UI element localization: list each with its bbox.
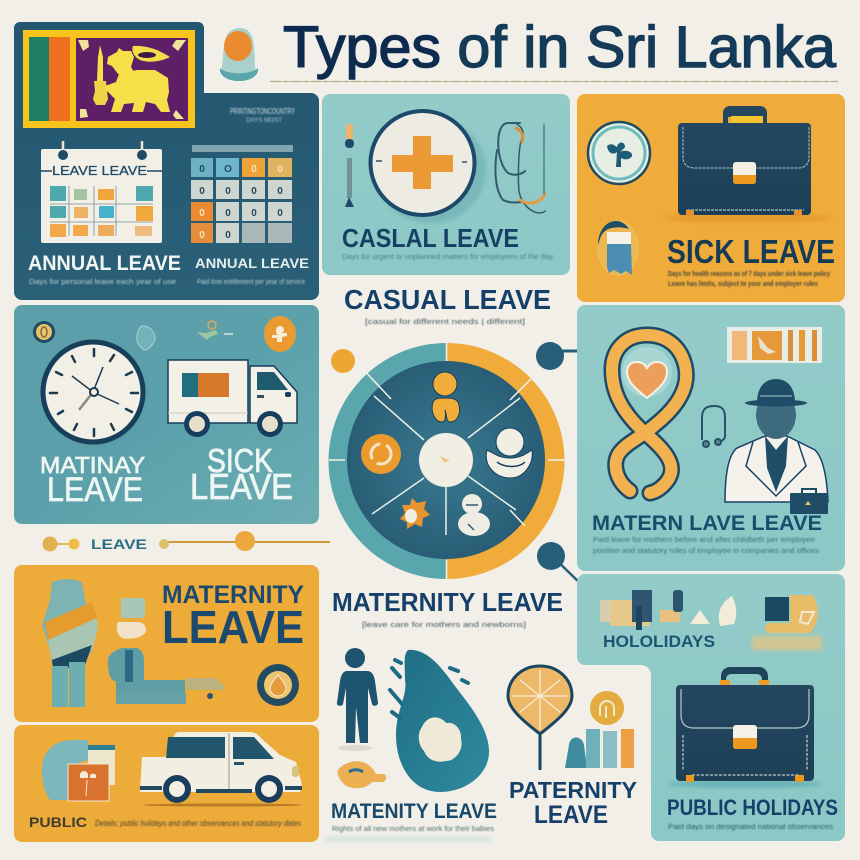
- icon: car: [140, 732, 302, 806]
- caption: maternity leave teal: position and statutory rules of employee in companies and offices: [593, 546, 819, 555]
- icon: person: [337, 648, 378, 751]
- chart: leave wheel: [328, 341, 565, 581]
- caption: annual leave: Days for personal leave each year of use: [29, 279, 176, 286]
- panel: maternity leave orange: [14, 565, 319, 722]
- icon: calendar grid: 0: [251, 208, 257, 219]
- heading: sick leave white: LEAVE: [190, 466, 293, 507]
- heading: maternity orange: MATERNITY: [162, 581, 304, 609]
- icon: delivery truck: [168, 360, 297, 437]
- icon: calendar grid: 0: [225, 208, 231, 219]
- icon: wheel segment right: [486, 428, 532, 478]
- panel: holidays and public holidays: [577, 574, 845, 841]
- icon: dropper: [345, 124, 354, 207]
- heading: matinay leave: [40, 452, 145, 509]
- icon: small coin: [33, 321, 55, 343]
- icon: briefcase: [662, 106, 832, 222]
- fuzzy caption above grid: PRINTINGTONCOUNTRY: [230, 107, 295, 116]
- panel: casual leave: [322, 94, 570, 275]
- heading: paternity leave: [509, 777, 637, 829]
- icon: magnifier: [508, 666, 572, 770]
- panel: public orange: [14, 725, 319, 842]
- icon: wheel segment lower right: [458, 494, 490, 536]
- icon: wheel segment lower left: [400, 498, 430, 529]
- heading: annual leave small: ANNUAL LEAVE: [195, 255, 309, 271]
- heading: annual leave: ANNUAL LEAVE: [28, 252, 181, 275]
- caption: annual leave: Paid time entitlement per year of service: [197, 279, 305, 286]
- heading: maternity orange: [162, 581, 304, 653]
- heading: paternity leave: LEAVE: [534, 801, 608, 829]
- icon: small plane: [197, 321, 233, 340]
- icon: clock: [43, 342, 144, 444]
- caption: matenity leave: Rights of all new mothers at work for their babies: [332, 826, 495, 833]
- title icon: [220, 28, 258, 81]
- caption: public: Details: public holidays and other observances and statutory dates: [95, 819, 301, 828]
- fuzzy caption above grid: DAYS MOST: [246, 118, 282, 124]
- icon: calendar grid: 0: [251, 164, 257, 175]
- connector dot: orange: [331, 349, 355, 373]
- caption: sick leave: Leave has limits, subject to your and employer rules: [668, 281, 818, 288]
- icon: stethoscope: [495, 123, 545, 213]
- caption: maternity leave teal: Paid leave for mothers before and after childbirth per employee: [593, 535, 815, 544]
- fuzzy caption above grid: [230, 107, 295, 124]
- icon: orange badge: [264, 316, 296, 352]
- caption: casual leave centre: [casual for different needs | different]: [365, 317, 525, 326]
- icon: calendar grid: 0: [277, 208, 283, 219]
- icon: ribbon: [612, 335, 686, 493]
- calendar label: LEAVE LEAVE: [52, 163, 147, 178]
- icon: heart: [622, 347, 672, 398]
- timeline: [42, 531, 330, 552]
- icon: calendar grid: 0: [277, 164, 283, 175]
- heading: matinay leave: MATINAY: [40, 452, 145, 478]
- icon: framed pictures: [727, 327, 822, 363]
- heading: maternity orange: LEAVE: [162, 601, 304, 653]
- icon: small stethoscope: [702, 406, 725, 447]
- icon: small orange token: [337, 761, 386, 788]
- icon: calendar grid: 0: [251, 186, 257, 197]
- caption: public holidays: Paid days on designated national observances: [668, 822, 833, 831]
- icon: doctor bag: [790, 489, 828, 514]
- panel: annual leave: [14, 22, 319, 300]
- icon: doctor: [725, 379, 828, 502]
- heading: holidays: HOLOLIDAYS: [603, 632, 715, 651]
- illustration: holiday objects: [600, 590, 822, 650]
- group: paternity illustrations: [508, 666, 637, 829]
- icon: briefcase 2: [667, 667, 823, 788]
- icon: wall calendar: [40, 141, 162, 243]
- icon: calendar grid: 0: [199, 164, 205, 175]
- heading: maternity leave teal: MATERN LAVE LEAVE: [592, 512, 822, 535]
- heading: matinay leave: LEAVE: [47, 471, 143, 509]
- icon: abstract figure: [42, 579, 98, 707]
- icon: bars: [565, 729, 634, 768]
- icon: coin: [590, 691, 624, 725]
- heading: sick leave white: SICK: [207, 442, 273, 479]
- panel: maternity and sick illustration: [14, 305, 319, 524]
- icon: Sri Lanka island: [390, 650, 489, 792]
- connector dot: navy bottom: [537, 542, 582, 585]
- icon: wheel segment top: [432, 372, 460, 422]
- caption: maternity leave teal: [593, 535, 819, 555]
- icon: document bundle: [42, 740, 115, 801]
- group: maternity illustrations: [326, 648, 497, 842]
- heading: paternity leave: PATERNITY: [509, 777, 637, 803]
- icon: calendar grid: [191, 145, 293, 243]
- icon: document shield: [598, 221, 638, 275]
- icon: faint gem: [137, 326, 155, 350]
- icon: calendar grid: 0: [199, 208, 205, 219]
- title: Types of in Sri Lanka: [283, 15, 837, 80]
- icon: calendar grid: O: [224, 164, 232, 175]
- caption: casual leave: Days for urgent or unplanned matters for employees of the day: [342, 254, 554, 261]
- icon: calendar grid: 0: [225, 230, 231, 241]
- caption: sick leave: [668, 271, 830, 288]
- heading: maternity leave centre: MATERNITY LEAVE: [332, 587, 563, 617]
- heading: casual leave centre: CASUAL LEAVE: [344, 284, 551, 315]
- icon: calendar grid: 0: [225, 186, 231, 197]
- title rule: [270, 80, 838, 82]
- icon: Sri Lanka flag: [23, 30, 195, 128]
- icon: calendar grid: 0: [199, 186, 205, 197]
- caption: maternity leave centre: [leave care for mothers and newborns]: [362, 620, 526, 629]
- icon: calendar grid: 0: [277, 186, 283, 197]
- connector dot: navy top: [536, 342, 580, 370]
- heading: sick leave white: [190, 442, 293, 507]
- icon: wheel segment left: [361, 434, 401, 474]
- icon: seated patient: [108, 598, 224, 704]
- panel: maternity leave teal: [577, 305, 845, 571]
- caption: annual leave: [29, 279, 305, 286]
- heading: public: PUBLIC: [29, 814, 87, 830]
- icon: medical dial: [370, 111, 486, 223]
- heading: sick leave: SICK LEAVE: [667, 233, 835, 270]
- icon: drop coin: [257, 664, 299, 706]
- heading: casual leave: CASLAL LEAVE: [342, 223, 519, 253]
- heading: matenity leave: MATENITY LEAVE: [331, 800, 497, 823]
- icon: round badge: [588, 122, 650, 184]
- icon: calendar grid: 0: [199, 230, 205, 241]
- timeline label: LEAVE: [91, 536, 147, 552]
- panel: sick leave: [577, 94, 845, 302]
